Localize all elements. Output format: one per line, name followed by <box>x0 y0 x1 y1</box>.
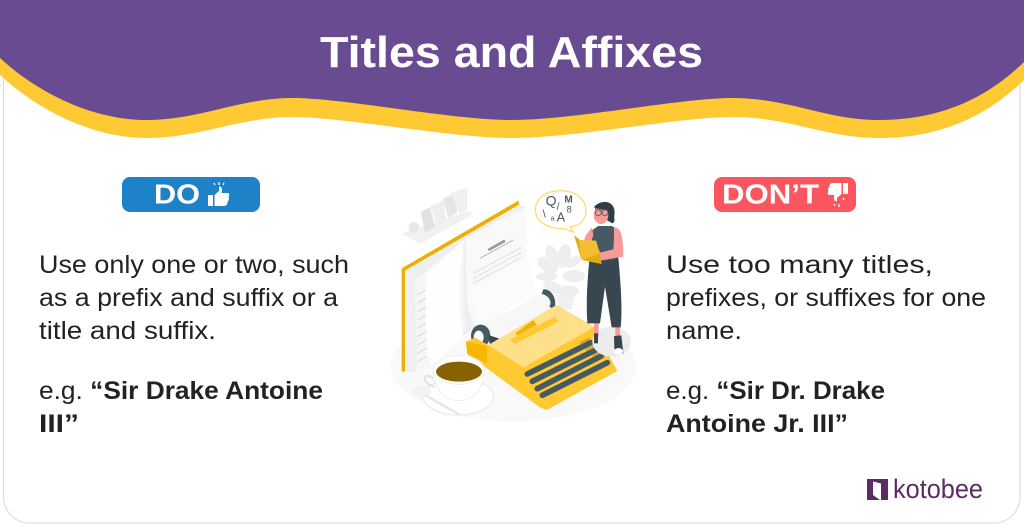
don't badge: DON’T <box>722 178 819 210</box>
text block: do description: Use only one or two, such <box>39 251 349 279</box>
speech bubble: 8 <box>567 205 572 215</box>
text block: don't example: Antoine Jr. III” <box>666 410 848 438</box>
text block: don't description: Use too many titles, <box>666 251 933 279</box>
text block: don't description: name. <box>666 317 742 345</box>
coffee cup <box>412 356 493 415</box>
open book <box>402 201 535 373</box>
text block: don't description <box>666 251 986 345</box>
speech bubble: / <box>557 202 560 213</box>
speech bubble: Q <box>546 192 557 208</box>
icon: plant <box>535 243 585 309</box>
person reading <box>574 202 631 357</box>
do badge: DO <box>154 178 200 210</box>
speech bubble: A <box>557 211 566 225</box>
text block: do description: title and suffix. <box>39 317 216 345</box>
speech bubble: M <box>564 195 573 206</box>
text block: don't example <box>666 377 885 438</box>
speech bubble <box>535 191 586 232</box>
title: Titles and Affixes <box>320 28 703 77</box>
text block: do description: as a prefix and suffix or a <box>39 284 338 312</box>
text block: do example: e.g. “Sir Drake Antoine <box>39 377 323 405</box>
speech bubble: a <box>551 214 556 223</box>
text block: don't description: prefixes, or suffixes for one <box>666 284 986 312</box>
paper and roller <box>471 257 555 347</box>
icon: shelf with books <box>402 187 472 244</box>
speech bubble: \ <box>543 208 547 220</box>
header wave: yellow band <box>0 0 1024 138</box>
kotobee logo: kotobee <box>893 474 983 504</box>
illustration: typewriter and reader <box>391 187 636 422</box>
header wave: purple band <box>0 0 1024 120</box>
icon: thumbs up <box>208 182 229 206</box>
do badge <box>122 177 260 212</box>
text block: do example <box>39 377 323 438</box>
text block: do description <box>39 251 349 345</box>
icon: kotobee book mark <box>867 479 888 500</box>
icon: thumbs down <box>828 183 848 207</box>
text block: don't example: e.g. “Sir Dr. Drake <box>666 377 885 405</box>
typewriter <box>466 305 617 410</box>
don't badge <box>714 177 856 212</box>
text block: do example: III” <box>39 410 79 438</box>
floor shadow <box>391 312 636 422</box>
